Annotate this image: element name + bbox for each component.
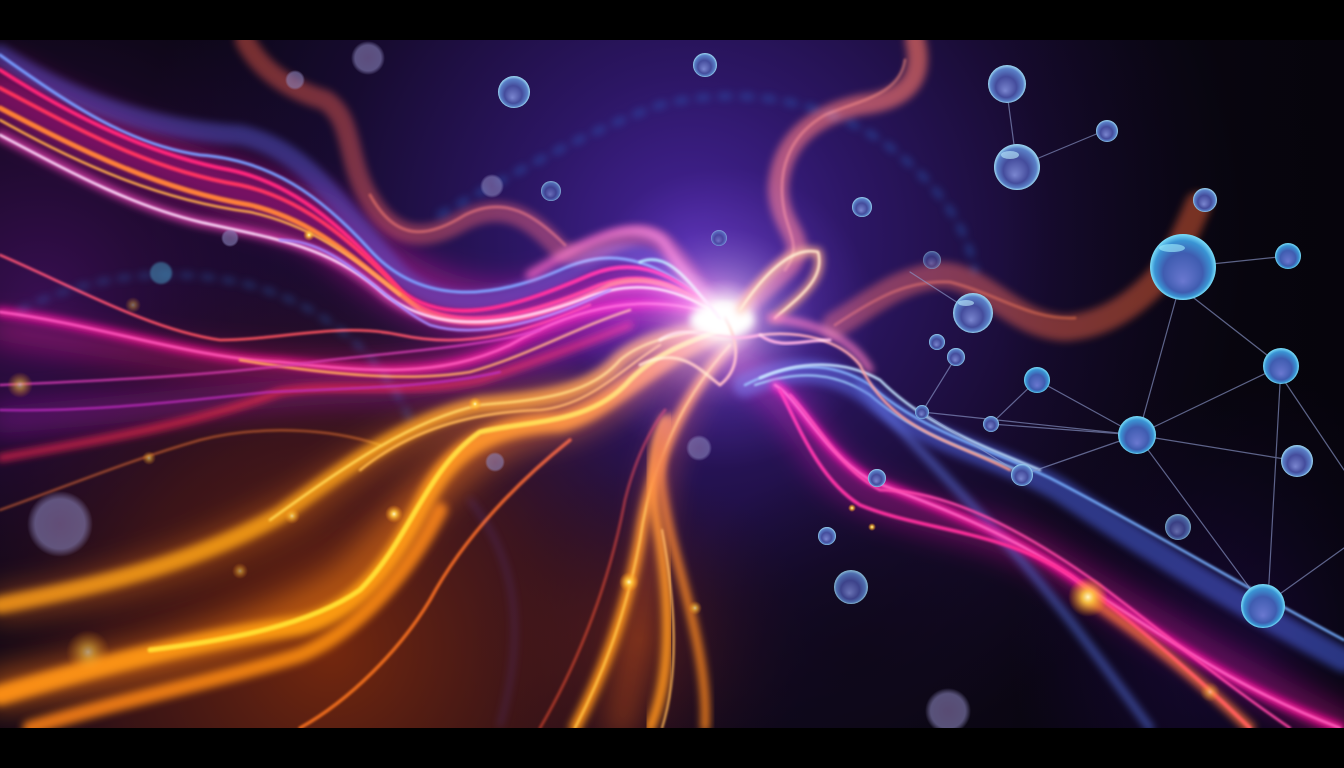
faint blue dotted arcs xyxy=(20,96,975,725)
ribbon bundle: bottom centre orange columns xyxy=(540,335,730,728)
brown ribbons upper xyxy=(245,40,1198,328)
ribbon bundle: middle left magenta and red strands xyxy=(0,255,725,510)
central light burst xyxy=(575,168,875,468)
glowing spark points xyxy=(7,229,1220,702)
network connecting lines xyxy=(910,100,1344,606)
spheres: floating out-of-focus bubbles xyxy=(27,41,971,734)
ribbon bundle: upper left blue, pink and white strands xyxy=(0,55,725,330)
spheres: molecular network xyxy=(818,65,1313,628)
ribbon bundle: lower right pink and blue xyxy=(735,334,1344,728)
pink hump near the centre xyxy=(530,231,725,318)
ribbon bundle: lower left orange and yellow xyxy=(0,325,725,728)
